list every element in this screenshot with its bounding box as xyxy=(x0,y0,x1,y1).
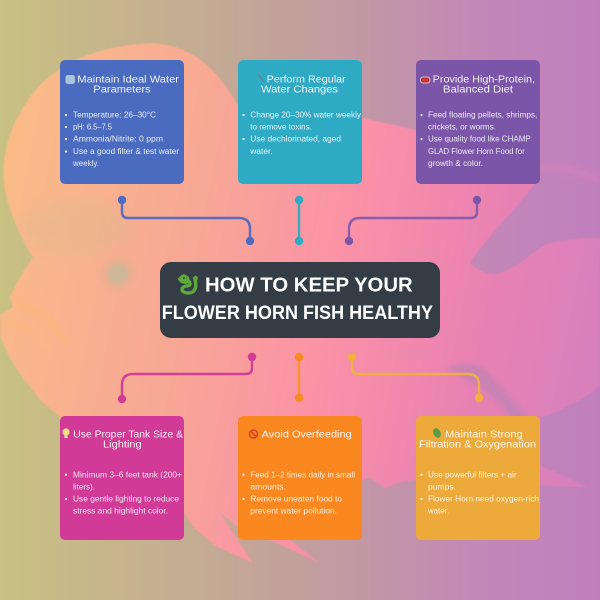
panel: diet: Balanced Diet xyxy=(443,84,513,96)
panel: water changes: water. xyxy=(249,147,273,156)
panel: avoid overfeeding: Feed 1–2 times daily in small xyxy=(250,470,355,479)
panel: avoid overfeeding: amounts. xyxy=(250,482,286,491)
panel: diet: Feed floating pellets, shrimps, xyxy=(428,111,537,120)
panel: avoid overfeeding: prevent water pollution. xyxy=(250,507,337,516)
icon: prohibited sign xyxy=(250,430,258,438)
icon: ice cube xyxy=(66,75,75,84)
panel: water changes: Perform Regular xyxy=(267,74,346,86)
panel: diet: Use quality food like CHAMP xyxy=(428,135,531,144)
panel: water changes: Use dechlorinated, aged xyxy=(250,135,341,144)
icon: meat xyxy=(420,77,430,83)
panel: diet: GLAD Flower Horn Food for xyxy=(428,147,525,156)
panel: tank and lighting: Use gentle lighting to reduce xyxy=(73,495,180,504)
title text: HOW TO KEEP YOUR xyxy=(205,275,413,297)
panel: tank and lighting: Use Proper Tank Size & xyxy=(73,428,183,440)
panel: filtration: Filtration & Oxygenation xyxy=(419,438,536,450)
panel: tank and lighting: Lighting xyxy=(103,438,142,450)
panel: filtration: pumps. xyxy=(428,482,456,491)
panel: avoid overfeeding xyxy=(238,416,362,540)
panel: tank and lighting: liters). xyxy=(73,482,95,491)
panel: filtration: Maintain Strong xyxy=(445,428,523,440)
icon: dragon xyxy=(178,274,198,293)
central title panel xyxy=(160,262,440,338)
central title panel: FLOWER HORN FISH HEALTHY xyxy=(162,303,433,324)
icon: wrench xyxy=(258,74,264,82)
panel: water parameters: weekly. xyxy=(72,159,99,168)
panel: avoid overfeeding: Remove uneaten food to xyxy=(250,495,343,504)
panel: filtration xyxy=(416,416,540,540)
panel: water changes: to remove toxins. xyxy=(250,123,312,132)
panel: water parameters: Use a good filter & test water xyxy=(73,147,179,156)
panel: diet: growth & color. xyxy=(428,159,483,168)
panel: tank and lighting xyxy=(60,416,184,540)
panel: filtration: Use powerful filters + air xyxy=(428,470,517,479)
panel: diet: crickets, or worms. xyxy=(428,123,496,132)
panel: filtration: Flower Horn need oxygen-rich xyxy=(428,495,539,504)
connector lines xyxy=(118,196,483,403)
panel: water parameters: Ammonia/Nitrite: 0 ppm xyxy=(73,135,163,144)
icon: light bulb xyxy=(62,428,70,438)
panel: filtration: water. xyxy=(427,507,449,516)
panel: water changes xyxy=(238,60,362,184)
panel: water parameters: pH: 6.5–7.5 xyxy=(73,123,113,132)
panel: water parameters: Temperature: 26–30°C xyxy=(73,111,156,120)
panel: avoid overfeeding: Avoid Overfeeding xyxy=(262,428,352,440)
panel: water changes: Water Changes xyxy=(261,84,338,96)
icon: leaf xyxy=(431,427,443,439)
panel: water parameters: Parameters xyxy=(93,84,151,96)
panel: water parameters: Maintain Ideal Water xyxy=(77,74,180,86)
panel: tank and lighting: Minimum 3–6 feet tank (200+ xyxy=(73,470,182,479)
panel: diet xyxy=(416,60,540,184)
panel: diet: Provide High-Protein, xyxy=(433,74,535,86)
panel: water changes: Change 20–30% water weekly xyxy=(250,111,361,120)
panel: water parameters xyxy=(60,60,184,184)
panel: tank and lighting: stress and highlight color. xyxy=(73,507,168,516)
